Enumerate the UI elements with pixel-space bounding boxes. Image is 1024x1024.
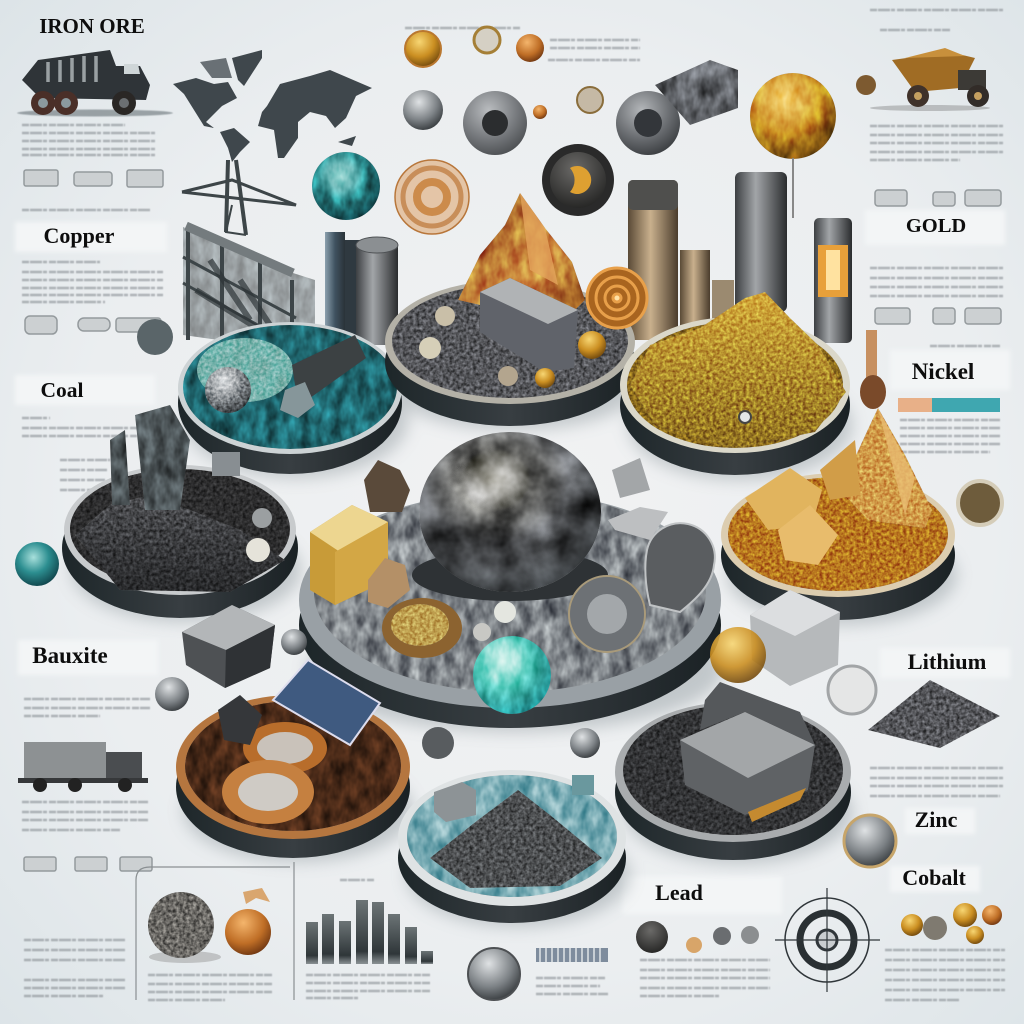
headings: Lead [655, 880, 703, 905]
top right gold truck [856, 48, 990, 111]
platform: gold [620, 292, 850, 475]
headings: GOLD [906, 215, 966, 237]
top small icons row [403, 27, 738, 155]
headings: Bauxite [32, 643, 108, 668]
headings: Nickel [912, 359, 974, 384]
platform: lead pile [398, 770, 626, 923]
target gauge [775, 888, 880, 992]
bottom left panel with spheres [136, 862, 294, 1000]
headings: Copper [44, 223, 115, 248]
lead objects [636, 921, 759, 953]
platform: chip [615, 682, 851, 860]
left small truck [18, 742, 148, 792]
headings: Coal [40, 378, 84, 402]
platform: middle top with copper mountain [385, 193, 647, 426]
lithium pile [868, 680, 1000, 748]
bar chart [306, 900, 433, 964]
platform shadows [71, 340, 957, 927]
cobalt nuggets [901, 903, 1002, 944]
world map [173, 50, 372, 162]
headings: Cobalt [902, 865, 966, 890]
small chip rows [24, 170, 1001, 871]
platform: bauxite [176, 660, 410, 858]
iron ore truck [17, 50, 173, 116]
platform: central with globe [299, 432, 721, 728]
platform: coal [62, 405, 298, 618]
coin and barcode [468, 948, 608, 1000]
label panels backing [15, 210, 1010, 914]
nickel colour bar [898, 398, 1000, 412]
platform: teal [178, 322, 402, 474]
headings: IRON ORE [39, 14, 145, 38]
headings: Zinc [915, 807, 958, 832]
large spheres and cylinders top [312, 73, 852, 345]
globe dome [412, 432, 608, 601]
cube icons and orbs [15, 319, 1002, 867]
platform: copper nuggets [721, 408, 955, 620]
headings: Lithium [908, 649, 987, 674]
tower structure [182, 160, 315, 350]
